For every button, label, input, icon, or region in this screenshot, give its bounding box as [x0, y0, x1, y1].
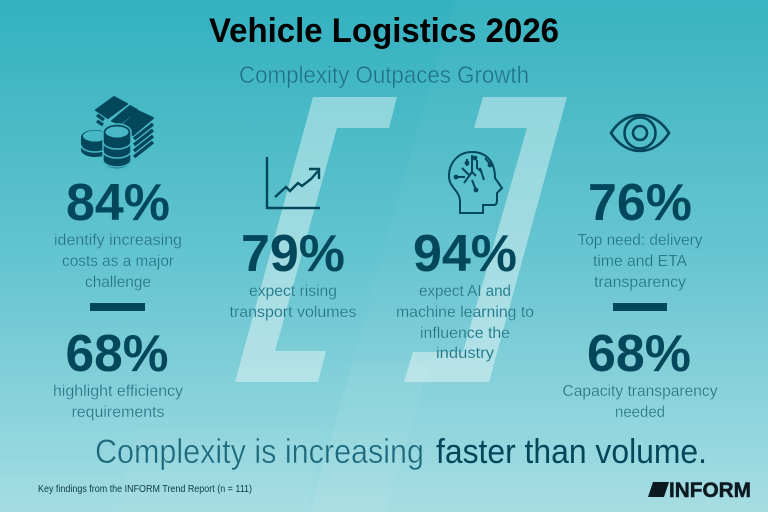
stat: 94%: 94% — [413, 225, 517, 283]
stat: 94%: machine learning to — [396, 304, 534, 321]
icon: eye — [611, 115, 669, 151]
source note: Key findings from the INFORM Trend Report (n = 111) — [38, 484, 252, 495]
stat: 79%: 79% — [241, 225, 345, 283]
right bracket — [404, 97, 567, 382]
title: Vehicle Logistics 2026 — [209, 12, 559, 50]
stat: 76%: Top need: delivery — [578, 232, 702, 249]
stat: 79%: transport volumes — [230, 304, 356, 321]
icon: money and coins — [81, 97, 153, 169]
divider right — [613, 303, 667, 311]
stat: 84%: identify increasing — [54, 232, 182, 249]
stat: 79% — [230, 225, 356, 321]
icon: AI head — [449, 152, 502, 213]
stat: 84%: costs as a major — [62, 253, 175, 270]
conclusion: faster than volume. — [436, 433, 707, 471]
subtitle: Complexity Outpaces Growth — [239, 62, 529, 89]
stat: 68% capacity: needed — [615, 404, 665, 421]
stat: 68% capacity — [562, 325, 718, 421]
stat: 68% efficiency — [53, 325, 183, 421]
left bracket — [235, 97, 397, 382]
logo: INFORM: INFORM — [669, 479, 751, 502]
stat: 68% capacity: 68% — [587, 325, 691, 383]
stat: 68% efficiency: 68% — [66, 325, 168, 383]
stat: 76% — [578, 174, 702, 291]
stat: 94%: influence the — [420, 325, 510, 342]
stat: 84% — [54, 174, 182, 291]
stat: 76%: 76% — [588, 174, 692, 232]
conclusion — [95, 433, 707, 471]
stat: 84%: challenge — [85, 274, 151, 291]
stat: 94%: expect AI and — [419, 283, 511, 300]
stat: 76%: transparency — [594, 274, 686, 291]
stat: 76%: time and ETA — [593, 253, 687, 270]
stat: 68% efficiency: highlight efficiency — [53, 383, 183, 400]
divider left — [90, 303, 145, 311]
icon: rising chart — [267, 157, 320, 208]
stat: 94%: industry — [436, 345, 494, 362]
stat: 84%: 84% — [66, 174, 170, 232]
stat: 79%: expect rising — [249, 283, 337, 300]
stat: 94% — [396, 225, 534, 362]
stat: 68% capacity: Capacity transparency — [562, 383, 718, 400]
stat: 68% efficiency: requirements — [72, 404, 164, 421]
conclusion: Complexity is increasing — [95, 433, 424, 471]
